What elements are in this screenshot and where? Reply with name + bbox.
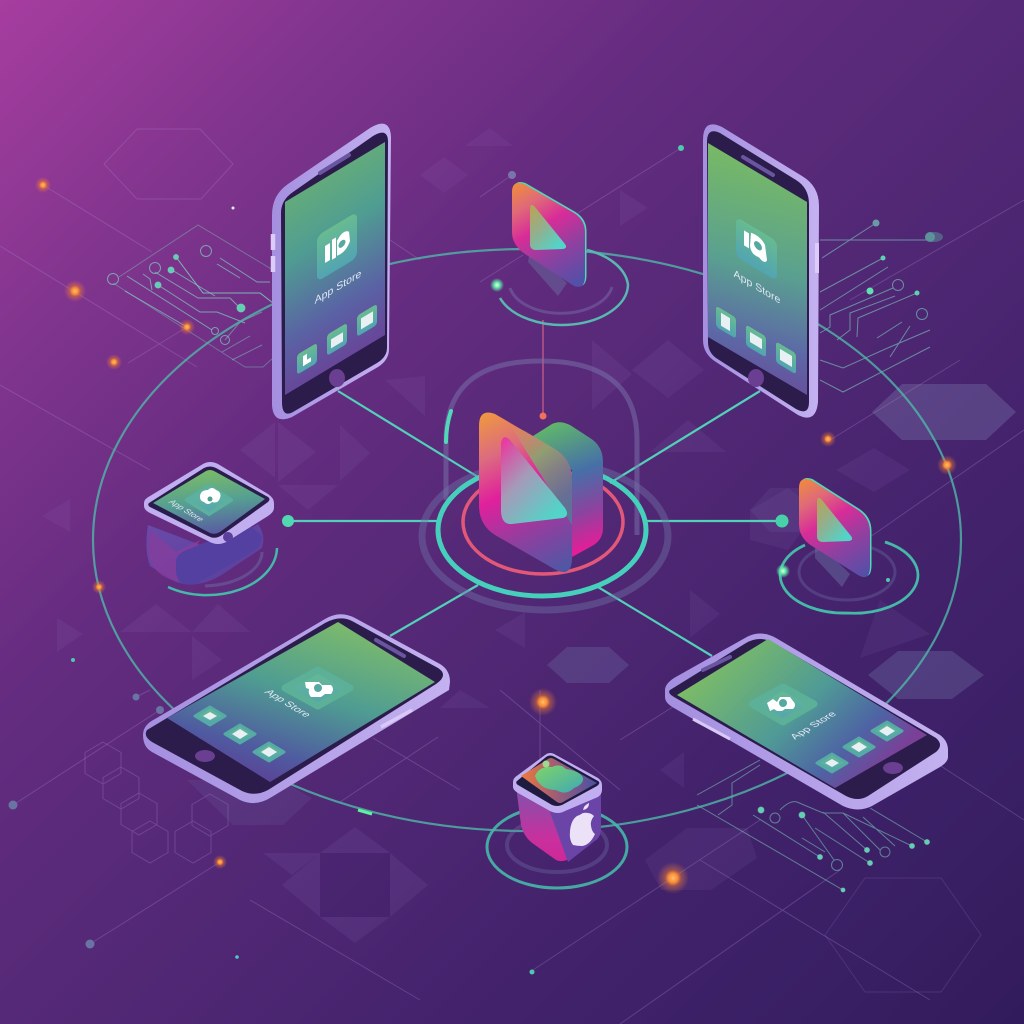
phone bezel <box>146 618 443 794</box>
phone body <box>703 124 819 418</box>
app store label: App Store <box>788 710 840 741</box>
watch app tile <box>187 486 231 514</box>
phone bezel <box>707 131 809 411</box>
background diamond bottom <box>263 827 428 943</box>
phone side button <box>815 243 819 273</box>
phone screen content <box>297 200 377 375</box>
background geometric shapes <box>42 128 930 890</box>
phone home button <box>329 369 345 387</box>
glowing nodes <box>35 145 957 974</box>
hub capsule outline <box>446 361 637 535</box>
phone home button <box>883 762 903 774</box>
watch bezel <box>148 466 270 538</box>
large orbit ring <box>93 249 961 831</box>
phone top right <box>703 124 819 418</box>
phone screen content <box>716 205 796 375</box>
hub app icon <box>479 412 603 572</box>
apple logo <box>570 803 595 846</box>
hub back panel <box>533 422 603 557</box>
watch label: App Store <box>166 498 207 523</box>
app glyph <box>744 228 767 264</box>
phone speaker <box>320 155 349 173</box>
phone speaker <box>743 157 773 175</box>
phone body <box>143 614 450 803</box>
watch bezel <box>516 756 599 806</box>
phone speaker <box>703 657 730 670</box>
hub triangle <box>501 437 567 524</box>
smartwatch left <box>144 462 294 595</box>
watch ring arc <box>168 548 277 595</box>
hub rings <box>422 462 668 610</box>
bottom watch ring <box>487 806 627 888</box>
main app glyph <box>767 697 795 711</box>
app store label: App Store <box>315 268 361 307</box>
hub front panel <box>479 412 572 572</box>
phone screen <box>167 622 435 782</box>
watch band <box>516 786 601 861</box>
phone landscape bottom left <box>143 614 450 803</box>
phone top left <box>272 124 391 419</box>
phone screen <box>708 143 807 395</box>
phone bezel <box>281 133 388 414</box>
small app tiles <box>195 707 284 761</box>
phone landscape bottom right <box>665 634 948 810</box>
vertical link with node <box>540 320 546 420</box>
watch case <box>513 753 602 813</box>
watch screen <box>521 758 597 803</box>
watch glyph <box>200 488 220 504</box>
phone side buttons <box>271 234 275 272</box>
phone screen <box>677 639 927 788</box>
right floating app icon <box>799 478 872 587</box>
top floating app icon <box>512 182 586 296</box>
phone home button <box>748 369 764 387</box>
hub front panel highlight <box>510 425 572 525</box>
watch face blob <box>535 765 583 793</box>
phone body <box>272 124 391 419</box>
phone body <box>665 634 948 810</box>
main app glyph <box>305 682 333 697</box>
phone speaker <box>376 640 404 656</box>
background hexagons <box>85 129 1016 992</box>
circuit trace left <box>108 225 273 367</box>
watch crown <box>223 532 233 542</box>
phone home button <box>195 750 215 762</box>
bottom smartwatch <box>513 753 602 862</box>
phone screen <box>285 142 385 395</box>
circuit trace bottom right <box>697 760 930 892</box>
watch band <box>146 524 263 584</box>
watch case <box>144 462 274 544</box>
right floating icon ring <box>776 514 918 613</box>
app store label: App Store <box>261 688 314 719</box>
phone side buttons <box>381 710 412 727</box>
main app tile <box>752 687 814 722</box>
circuit trace right <box>820 220 943 392</box>
app glyph <box>325 228 350 264</box>
top floating icon ring <box>490 250 628 325</box>
phone bezel <box>669 639 940 799</box>
connector lines to hub <box>289 391 782 656</box>
watch screen <box>153 470 265 534</box>
main app tile <box>285 670 350 706</box>
app store label: App Store <box>734 268 780 307</box>
phone side buttons <box>693 719 730 739</box>
small app tiles <box>817 722 902 772</box>
